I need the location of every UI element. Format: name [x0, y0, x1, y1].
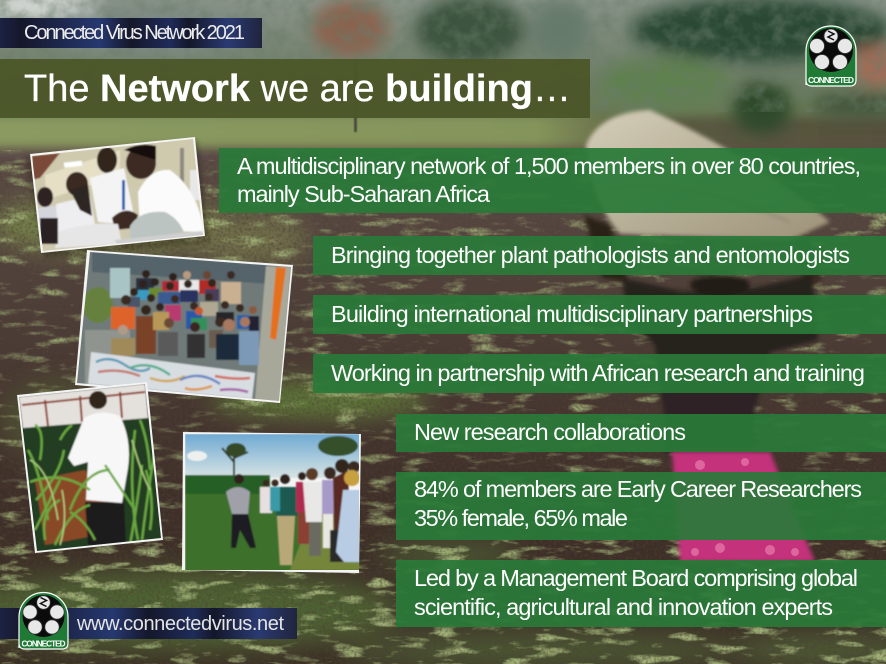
logo: Connected, bottom left: CONNECTED [22, 640, 66, 648]
logo: Connected, top right: CONNECTED [808, 75, 854, 85]
statement bar: member demographics [396, 472, 886, 540]
website strip: www.connectedvirus.net [76, 613, 284, 635]
statement bar: research collaborations [396, 414, 886, 452]
statement bar: member demographics: 35% female, 65% male [414, 505, 628, 531]
logo: Connected, bottom left [19, 592, 68, 649]
statement bar: research collaborations: New research collaborations [414, 419, 686, 445]
statement bar: African research and training: Working in partnership with African research and training [331, 360, 865, 386]
statement bar: African research and training [313, 354, 886, 393]
website strip [0, 608, 297, 639]
logo: Connected, top right [806, 26, 856, 86]
title banner: The Network we are building… [24, 68, 571, 110]
photo: scientist among plants [17, 382, 165, 554]
photo: field visit group [182, 432, 361, 573]
statement bar: membership: mainly Sub-Saharan Africa [237, 181, 491, 207]
statement bar: management board: scientific, agricultural and innovation experts [414, 594, 833, 620]
statement bar: membership: A multidisciplinary network of 1,500 members in over 80 countries, [237, 153, 861, 179]
statement bar: management board: Led by a Management Board comprising global [414, 565, 858, 591]
statement bar: partnerships: Building international multidisciplinary partnerships [331, 301, 813, 327]
header strip: Connected Virus Network 2021 [0, 18, 262, 48]
statement bar: membership [219, 148, 886, 213]
photo: network group on staircase with banner [75, 250, 295, 405]
photo: lab scientists [26, 136, 210, 258]
statement bar: partnerships [313, 295, 886, 334]
statement bar: member demographics: 84% of members are Early Career Researchers [414, 476, 862, 502]
statement bar: pathologists and entomologists [313, 236, 886, 275]
header strip: Connected Virus Network 2021: Connected Virus Network 2021 [24, 22, 245, 44]
statement bar: pathologists and entomologists: Bringing together plant pathologists and entomologists [331, 242, 850, 268]
title banner [0, 59, 590, 118]
statement bar: management board [396, 560, 886, 627]
